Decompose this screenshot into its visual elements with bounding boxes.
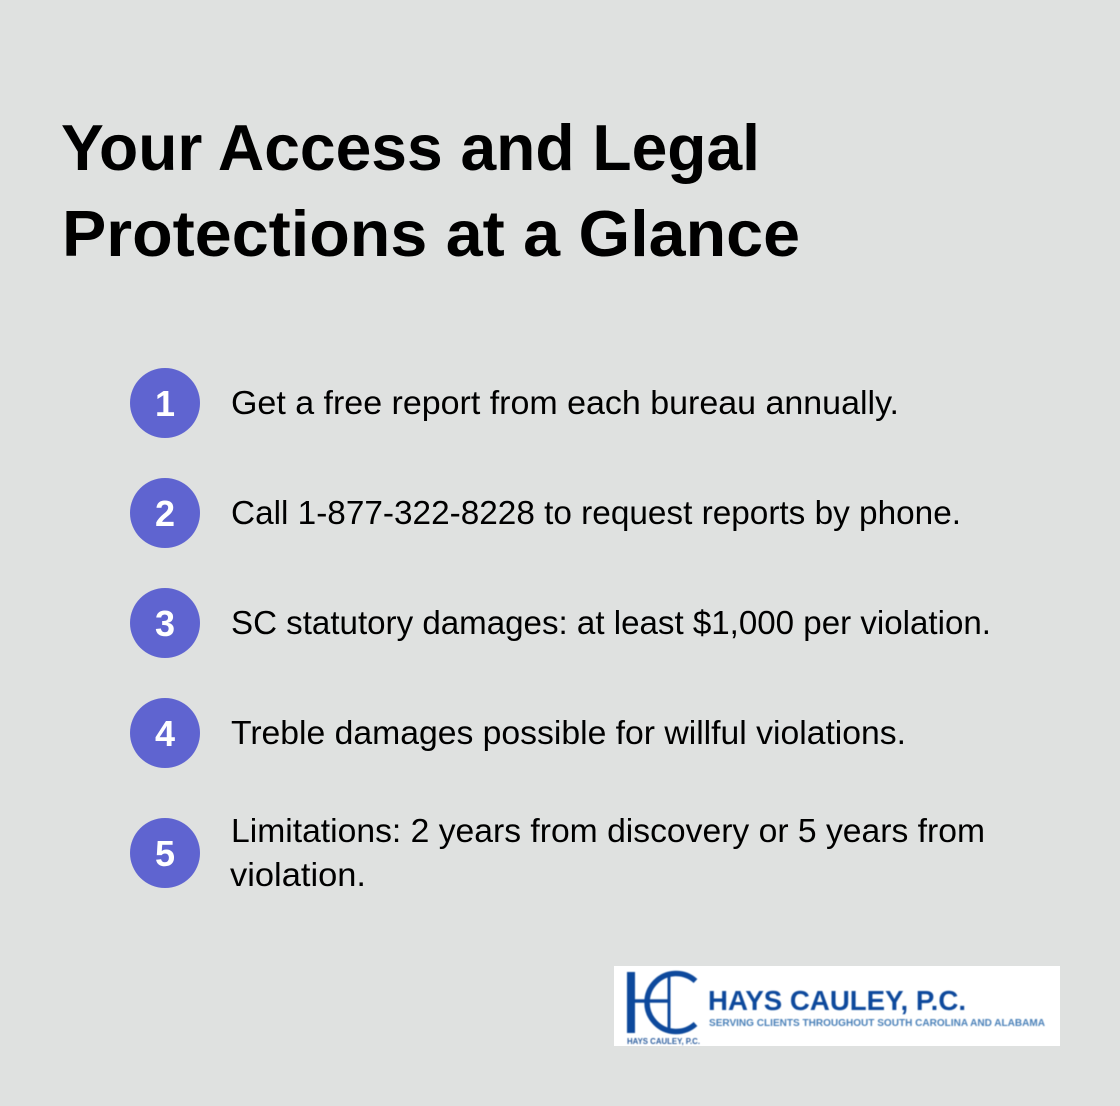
item 3: statutory damages: SC statutory damages: at least $1,000 per violation.	[231, 604, 991, 641]
item 2: phone request: 2	[155, 493, 175, 534]
item 4: treble damages: 4	[155, 713, 175, 754]
logo: Hays Cauley, P.C.	[614, 966, 1060, 1046]
item 2: phone request: Call 1-877-322-8228 to request reports by phone.	[231, 494, 961, 531]
item 3: statutory damages	[130, 588, 991, 658]
item 4: treble damages	[130, 698, 906, 768]
item 3: statutory damages: 3	[155, 603, 175, 644]
item 1: free report	[130, 368, 899, 438]
item 1: free report: 1	[155, 383, 175, 424]
item 5: limitations	[130, 812, 985, 893]
logo: Hays Cauley, P.C.: HAYS CAULEY, P.C.	[708, 985, 966, 1016]
item 4: treble damages: Treble damages possible for willful violations.	[231, 714, 906, 751]
item 5: limitations: Limitations: 2 years from discovery or 5 years from	[231, 812, 985, 849]
title: Your Access and Legal	[61, 111, 760, 184]
logo: Hays Cauley, P.C.: SERVING CLIENTS THROUGHOUT SOUTH CAROLINA AND ALABAMA	[709, 1017, 1045, 1029]
logo: Hays Cauley, P.C.: HAYS CAULEY, P.C.	[627, 1037, 700, 1046]
item 5: limitations: 5	[155, 833, 175, 874]
title: Protections at a Glance	[62, 197, 800, 270]
icon: HC monogram	[631, 972, 696, 1033]
item 2: phone request	[130, 478, 961, 548]
item 5: limitations: violation.	[230, 856, 366, 893]
title	[61, 111, 800, 270]
item 1: free report: Get a free report from each bureau annually.	[231, 384, 899, 421]
